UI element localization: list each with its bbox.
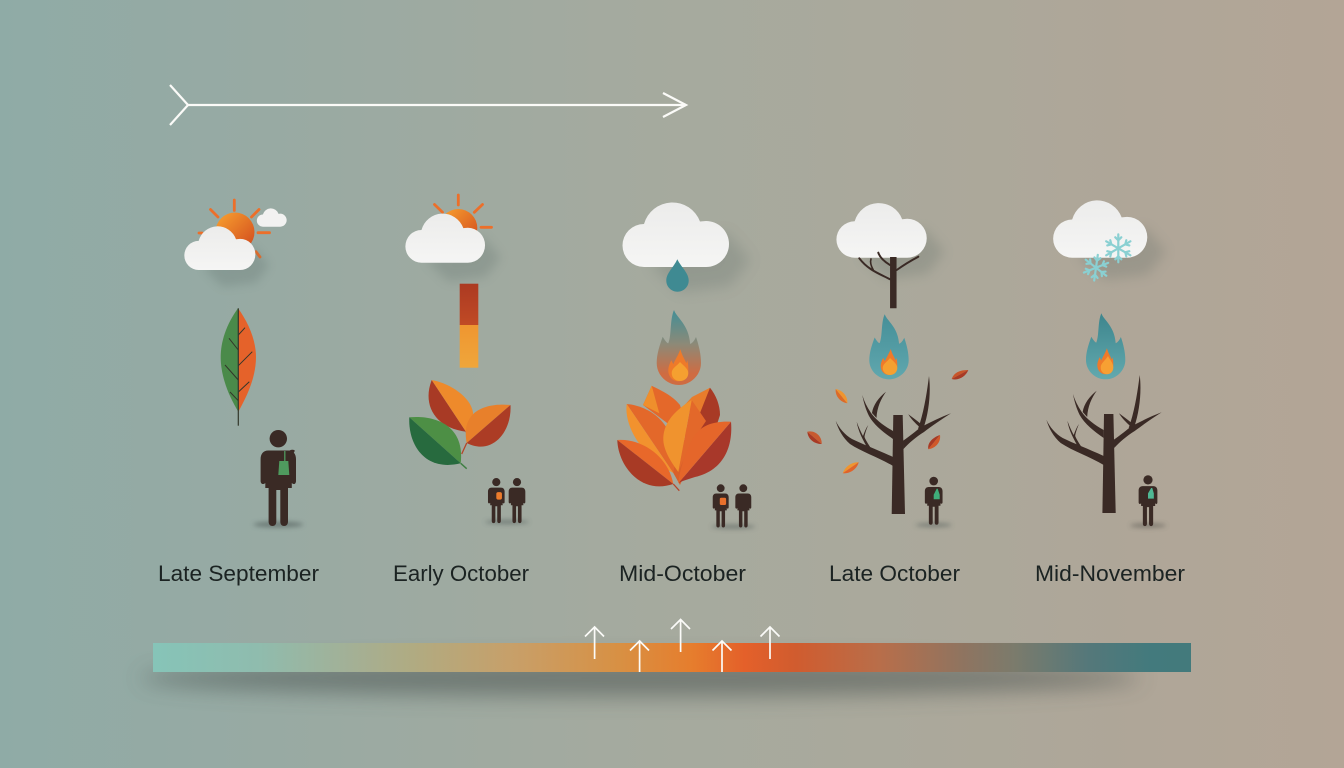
label: Late September: Late September: [158, 561, 319, 586]
column: Late October: [807, 203, 968, 527]
gradient temperature bar: [140, 620, 1191, 696]
icon: dark teal flame: [1086, 313, 1125, 379]
icon: rain cloud: [622, 202, 750, 292]
column: Early October: [405, 195, 529, 524]
icon: two people: [711, 484, 755, 529]
icon: two people: [485, 478, 529, 524]
icon: sun with clouds: [184, 200, 287, 287]
column: Late September: [184, 200, 303, 528]
icon: cloud with small bare tree: [836, 203, 945, 308]
icon: cluster of autumn leaves: [617, 386, 731, 491]
icon: teal flame: [869, 314, 909, 379]
rising arrows: [585, 620, 780, 672]
column: Mid-October: [617, 202, 755, 529]
icon: bare tree: [836, 376, 951, 514]
icon: flame fading teal to orange: [657, 310, 701, 385]
icon: person with green backpack: [253, 430, 303, 528]
icon: bare tree: [1046, 375, 1162, 513]
icon: cloud with snowflakes: [1053, 200, 1166, 282]
icon: person with teal pack: [1130, 475, 1166, 528]
icon: sun behind cloud: [405, 195, 501, 282]
icon: half green half orange leaf: [221, 308, 256, 426]
label: Mid-November: Mid-November: [1035, 561, 1185, 586]
label: Early October: Early October: [393, 561, 529, 586]
label: Mid-October: Mid-October: [619, 561, 746, 586]
icon: three leaves: [409, 380, 511, 469]
label: Late October: Late October: [829, 561, 960, 586]
timeline arrow: [170, 85, 686, 125]
icon: person with green pack: [916, 477, 952, 527]
column: Mid-November: [1046, 200, 1166, 528]
icon: red and orange thermometer bar: [460, 284, 478, 368]
icon: falling leaves: [807, 370, 968, 473]
